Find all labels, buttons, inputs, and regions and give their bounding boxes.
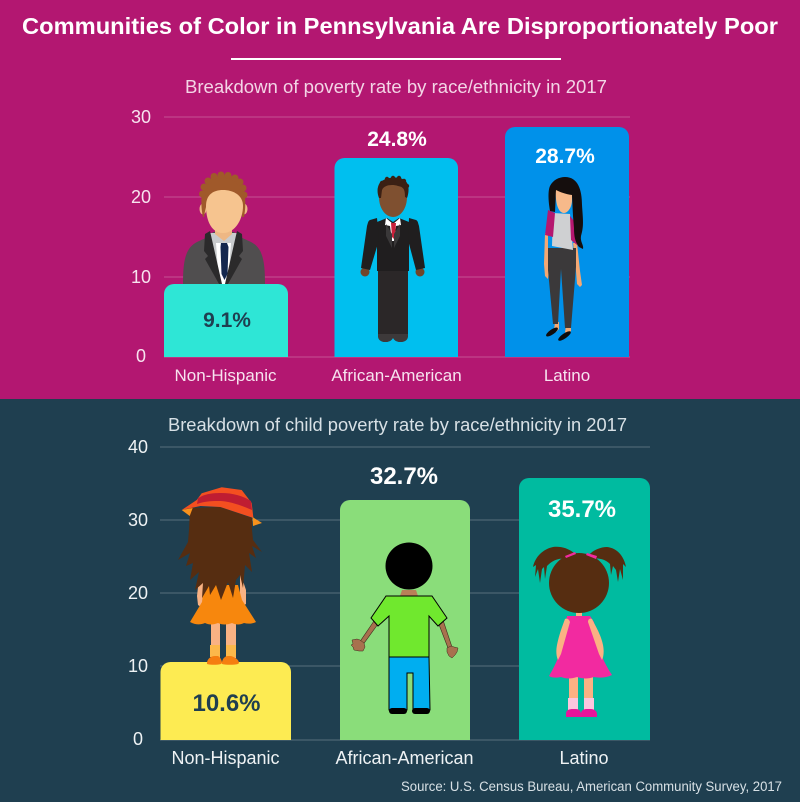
top chart y axis <box>131 107 151 366</box>
bar: Non-Hispanic 10.6% <box>160 662 291 740</box>
top chart y axis: 10 <box>131 267 151 287</box>
bar: Latino 28.7%: 28.7% <box>535 145 595 168</box>
bottom chart y axis: 0 <box>133 729 143 749</box>
bar: African-American 24.8% <box>334 128 458 357</box>
source note: Source: U.S. Census Bureau, American Community Survey, 2017 <box>401 779 782 794</box>
icon: girl with pigtails <box>533 547 626 717</box>
top panel: poverty rate chart <box>131 77 630 385</box>
bottom chart category labels: Latino <box>559 748 609 768</box>
bottom chart heading: Breakdown of child poverty rate by race/ethnicity in 2017 <box>168 415 627 435</box>
bottom panel: child poverty rate chart <box>128 415 782 794</box>
top chart y axis: 30 <box>131 107 151 127</box>
top chart category labels: Latino <box>544 366 590 385</box>
icon: man in black suit <box>360 176 425 342</box>
bar: African-American 32.7%: 32.7% <box>370 463 438 490</box>
bottom chart y axis: 20 <box>128 583 148 603</box>
title: Communities of Color in Pennsylvania Are Disproportionately Poor <box>22 13 778 39</box>
bottom chart category labels: African-American <box>335 748 474 768</box>
bottom chart y axis: 30 <box>128 510 148 530</box>
top chart y axis: 20 <box>131 187 151 207</box>
top chart y axis: 0 <box>136 346 146 366</box>
bar: African-American 24.8%: 24.8% <box>367 128 427 151</box>
top chart heading: Breakdown of poverty rate by race/ethnicity in 2017 <box>185 77 607 97</box>
icon: woman with dark hair <box>544 177 583 342</box>
top chart category labels: African-American <box>331 366 462 385</box>
bottom chart category labels: Non-Hispanic <box>171 748 280 768</box>
bottom chart category labels <box>171 748 609 768</box>
bar: Non-Hispanic 9.1%: 9.1% <box>203 309 251 332</box>
bar: Latino 35.7% <box>519 478 650 740</box>
top chart category labels: Non-Hispanic <box>174 366 277 385</box>
bottom chart y axis: 40 <box>128 437 148 457</box>
bar: Latino 28.7% <box>505 127 629 357</box>
icon: man in grey suit <box>183 172 265 284</box>
bar: Non-Hispanic 10.6%: 10.6% <box>192 690 261 717</box>
bar: African-American 32.7% <box>340 463 470 740</box>
bottom chart y axis: 10 <box>128 656 148 676</box>
top chart category labels <box>174 366 590 385</box>
icon: boy in green shirt <box>351 542 458 714</box>
icon: girl with orange hat <box>178 487 262 665</box>
bar: Non-Hispanic 9.1% <box>164 284 288 357</box>
bottom chart y axis <box>128 437 148 749</box>
bar: Latino 35.7%: 35.7% <box>548 496 616 523</box>
